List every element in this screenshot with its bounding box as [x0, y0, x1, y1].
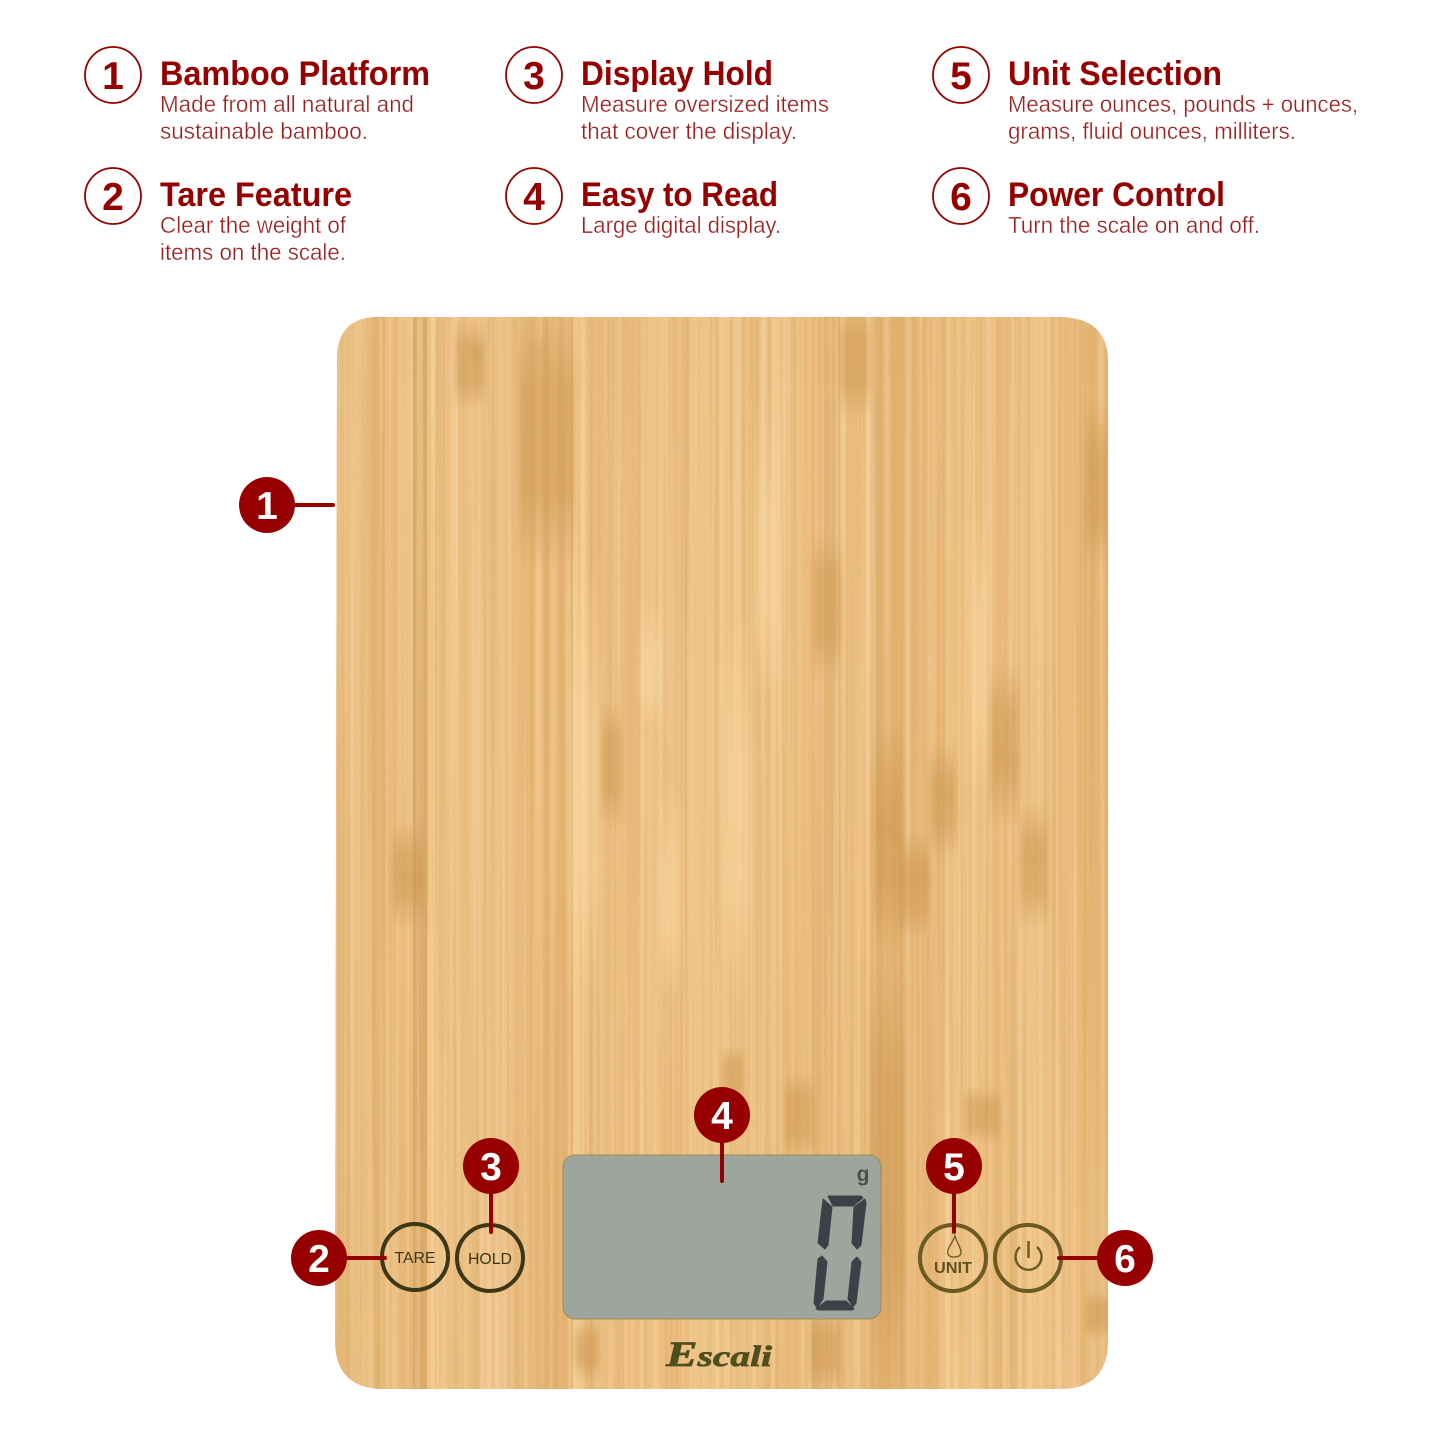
legend item 2: tare feature: items on the scale.: [160, 239, 346, 265]
legend item 1: bamboo platform: sustainable bamboo.: [160, 118, 368, 144]
tare button: [382, 1224, 448, 1290]
callout 4: display: 4: [711, 1095, 733, 1138]
lcd display: [563, 1155, 881, 1319]
callout 6: power: 6: [1114, 1238, 1136, 1281]
callout 1: platform: [239, 477, 333, 533]
callout 2: tare: [291, 1230, 385, 1286]
legend item 1: bamboo platform: 1: [102, 55, 124, 98]
legend item 2: tare feature: [85, 168, 352, 265]
legend item 2: tare feature: Tare Feature: [160, 176, 352, 214]
legend item 6: power control: 6: [950, 176, 972, 219]
legend item 1: bamboo platform: Made from all natural and: [160, 91, 414, 117]
panel: feature legend: [85, 47, 1358, 265]
callout 6: power: [1059, 1230, 1153, 1286]
legend item 6: power control: Turn the scale on and off.: [1008, 212, 1260, 238]
legend item 2: tare feature: Clear the weight of: [160, 212, 346, 238]
callout 3: hold: [463, 1138, 519, 1232]
legend item 3: display hold: Display Hold: [581, 55, 773, 93]
callout 3: hold: 3: [480, 1146, 502, 1189]
tare and hold buttons: [382, 1224, 523, 1291]
digit zero: [814, 1196, 866, 1310]
unit button: UNIT: [934, 1260, 973, 1277]
legend item 3: display hold: 3: [523, 55, 545, 98]
bamboo knots: [395, 345, 1045, 880]
legend item 2: tare feature: 2: [102, 176, 124, 219]
panel: bamboo scale platform: [330, 300, 1120, 1395]
legend item 4: easy to read: Easy to Read: [581, 176, 778, 214]
bamboo wood surface: [330, 300, 1120, 1395]
legend item 3: display hold: that cover the display.: [581, 118, 797, 144]
legend item 1: bamboo platform: Bamboo Platform: [160, 55, 430, 93]
hold button: [457, 1225, 523, 1291]
callout 4: display: [694, 1087, 750, 1181]
legend item 5: unit selection: grams, fluid ounces, milliters.: [1008, 118, 1296, 144]
callout 2: tare: 2: [308, 1238, 330, 1281]
callout 5: unit: [926, 1138, 982, 1232]
legend item 4: easy to read: 4: [523, 176, 545, 219]
tare button: TARE: [394, 1250, 436, 1267]
unit button: [920, 1225, 986, 1291]
unit indicator g: g: [857, 1163, 869, 1186]
brand logo: Escali: E scali: [665, 1334, 773, 1374]
hold button: HOLD: [468, 1251, 512, 1268]
legend item 3: display hold: Measure oversized items: [581, 91, 829, 117]
legend item 4: easy to read: [506, 168, 781, 238]
legend item 5: unit selection: Unit Selection: [1008, 55, 1222, 93]
legend item 5: unit selection: 5: [950, 55, 972, 98]
legend item 6: power control: Power Control: [1008, 176, 1225, 214]
legend item 6: power control: [933, 168, 1260, 238]
legend item 3: display hold: [506, 47, 829, 144]
callout 5: unit: 5: [943, 1146, 965, 1189]
legend item 5: unit selection: Measure ounces, pounds + ounces,: [1008, 91, 1358, 117]
legend item 4: easy to read: Large digital display.: [581, 212, 781, 238]
callout 1: platform: 1: [256, 485, 278, 528]
legend item 5: unit selection: [933, 47, 1358, 144]
legend item 1: bamboo platform: [85, 47, 430, 144]
power button: [995, 1225, 1061, 1291]
